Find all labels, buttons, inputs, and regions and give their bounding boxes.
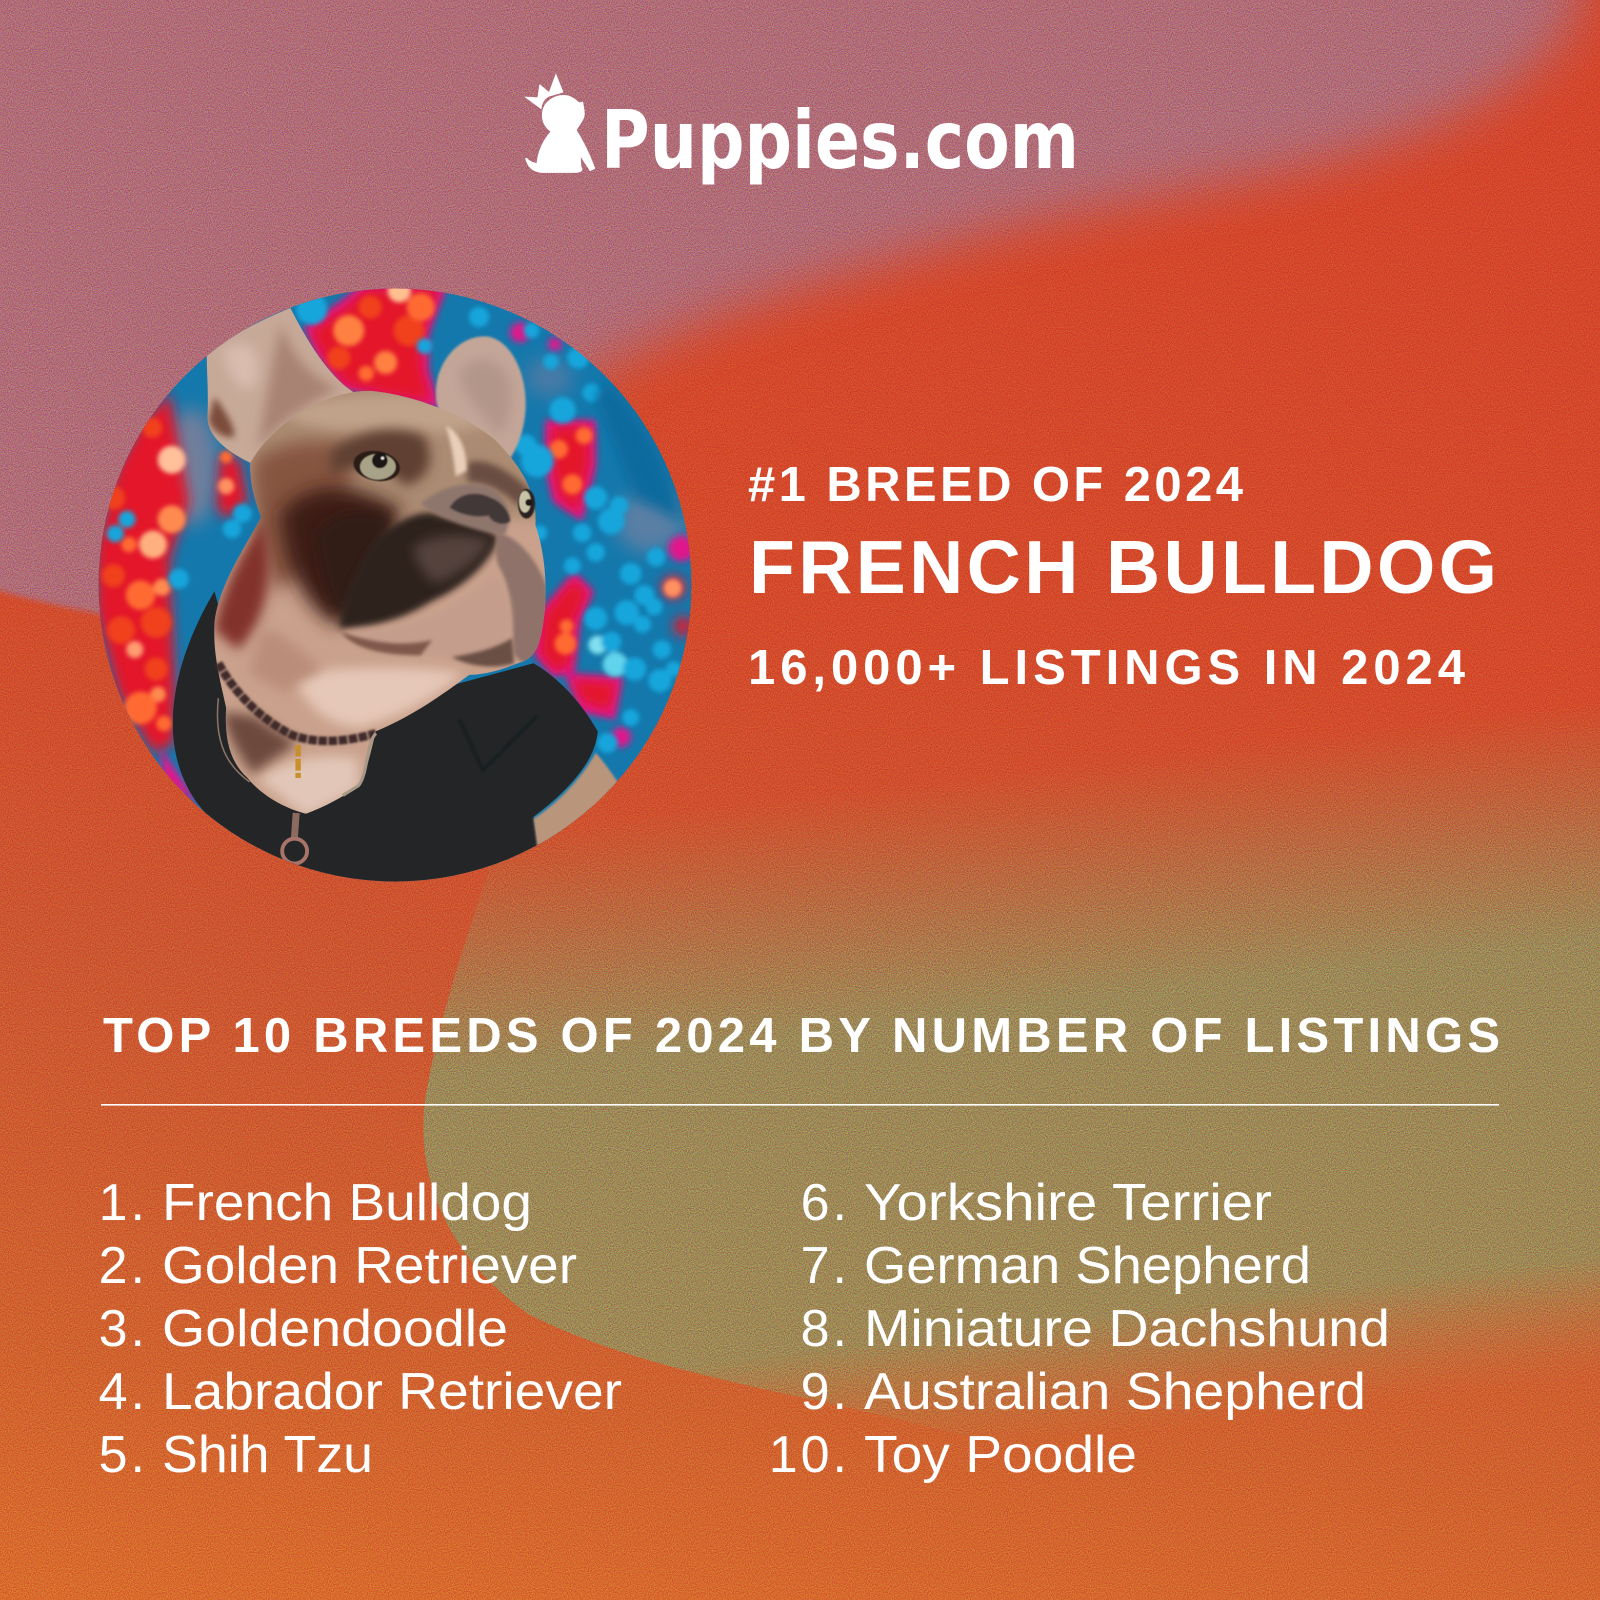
- ranked list: column one: 1.: [99, 1174, 148, 1232]
- kicker: #1 BREED OF 2024: [748, 458, 1243, 512]
- breed name: FRENCH BULLDOG: [749, 525, 1497, 609]
- ranked list: column two: 10.: [769, 1426, 850, 1484]
- photo: french bulldog in circle: [90, 279, 700, 890]
- dog head, neck and chest: [214, 390, 546, 814]
- ranked list: column two: Yorkshire Terrier: [864, 1174, 1272, 1232]
- left face warm side: [251, 441, 355, 591]
- ranked list: column two: Miniature Dachshund: [864, 1300, 1390, 1358]
- featured breed text: [748, 458, 1497, 695]
- red lit neck: [214, 521, 269, 650]
- neck shade: [222, 712, 296, 774]
- logo: [524, 73, 1079, 187]
- ranked list: column two: 8.: [801, 1300, 850, 1358]
- icon: puppy with crown: [524, 73, 594, 172]
- dog ear left: [206, 308, 354, 463]
- muzzle top: [421, 484, 509, 535]
- ranked list: column one: Shih Tzu: [162, 1426, 373, 1484]
- dog ear right: [436, 336, 526, 461]
- dog jacket seam: [460, 716, 537, 770]
- ranked list: column two: Australian Shepherd: [864, 1363, 1366, 1421]
- olive background wave: [423, 500, 1600, 1560]
- dog right leg: [533, 753, 623, 848]
- dog jacket: [173, 591, 598, 887]
- dark muzzle: [339, 513, 498, 628]
- ranked list: column one: 4.: [99, 1363, 148, 1421]
- logo wordmark: Puppies.com: [601, 94, 1079, 187]
- ranked list: column one: Labrador Retriever: [162, 1363, 622, 1421]
- chest fur highlight: [292, 668, 463, 727]
- ranked list: column two: 9.: [801, 1363, 850, 1421]
- ranked list: column two: Toy Poodle: [864, 1426, 1137, 1484]
- ranked list: column two: German Shepherd: [864, 1237, 1311, 1295]
- ranked list: column one: [99, 1174, 622, 1484]
- dog eye right: [518, 489, 535, 518]
- dog nose: [450, 494, 510, 524]
- ranked list: column one: 2.: [99, 1237, 148, 1295]
- section heading: TOP 10 BREEDS OF 2024 BY NUMBER OF LISTINGS: [103, 1009, 1500, 1063]
- ranked list: column one: Golden Retriever: [162, 1237, 577, 1295]
- dog eye left: [351, 447, 402, 485]
- white blaze: [446, 426, 467, 476]
- dog collar and tag: [217, 663, 376, 864]
- ranked list: column two: 7.: [801, 1237, 850, 1295]
- photo background bokeh: [90, 279, 700, 890]
- ranked list: column one: Goldendoodle: [162, 1300, 508, 1358]
- ranked list: column two: [769, 1174, 1390, 1484]
- ranked list: column one: French Bulldog: [162, 1174, 532, 1232]
- chin folds: [343, 574, 511, 660]
- eye socket shading: [331, 429, 430, 486]
- right jowl: [496, 533, 548, 664]
- listings count: 16,000+ LISTINGS IN 2024: [748, 641, 1465, 695]
- brown cheek: [281, 488, 401, 626]
- upper head base: [250, 391, 536, 528]
- forehead: [288, 395, 506, 434]
- ranked list: column one: 3.: [99, 1300, 148, 1358]
- mauve background wave: [0, 0, 1590, 618]
- ranked list: column two: 6.: [801, 1174, 850, 1232]
- ranked list: column one: 5.: [99, 1426, 148, 1484]
- magenta halo: [160, 284, 695, 805]
